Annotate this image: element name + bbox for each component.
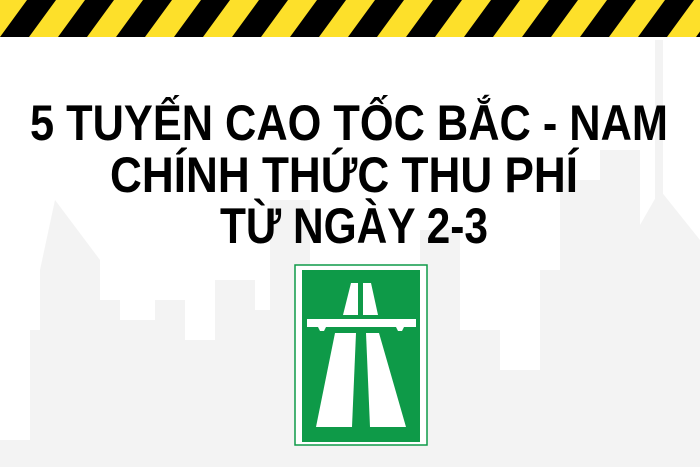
- title: TỪ NGÀY 2-3: [220, 198, 488, 254]
- icon: highway sign: [294, 264, 428, 446]
- title: CHÍNH THỨC THU PHÍ: [110, 147, 579, 203]
- hazard stripe band: [0, 0, 700, 37]
- title: [30, 94, 668, 254]
